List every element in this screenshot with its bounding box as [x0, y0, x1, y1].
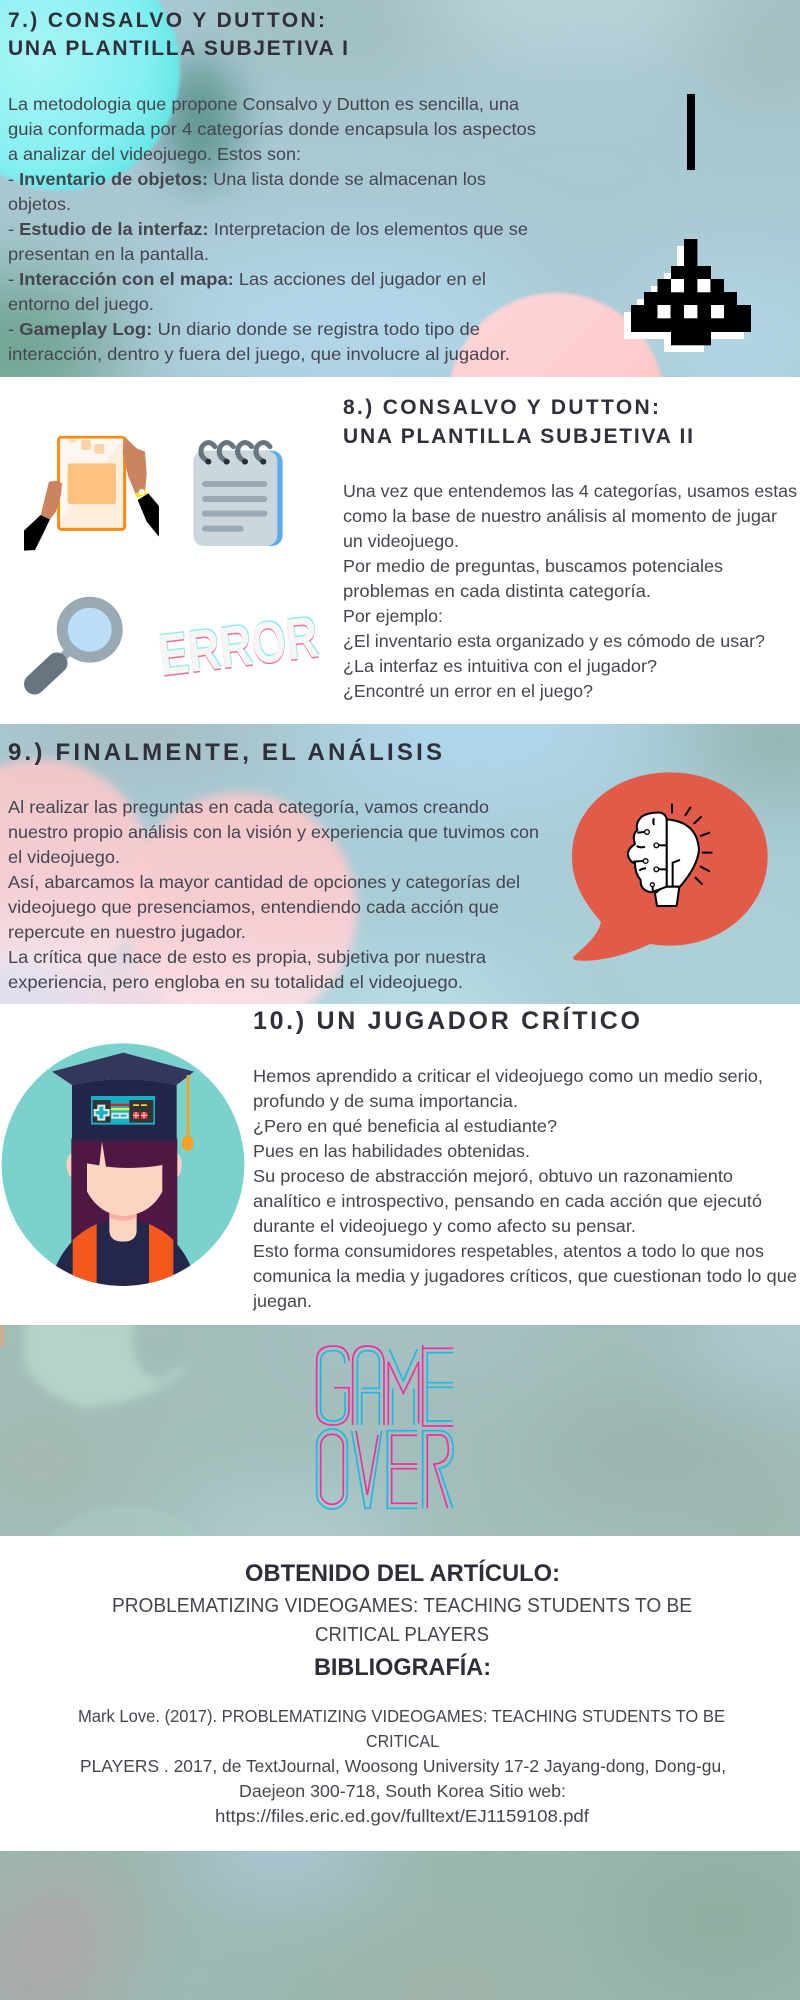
panel: section 7 plantilla subjetiva I: [0, 0, 800, 377]
text block: [343, 481, 797, 701]
text block: Esto forma consumidores respetables, atentos a todo lo que nos: [253, 1241, 764, 1261]
text block: repercute en nuestro jugador.: [8, 922, 246, 942]
illustration: neon GAME OVER lettering: [317, 1345, 453, 1509]
panel: sources and bibliography: [78, 1559, 726, 1826]
panel: game over band: [0, 1325, 800, 1536]
text block: - Interacción con el mapa: Las acciones del jugador en el: [8, 269, 486, 289]
icon: glitched ERROR text: ERROR: [155, 606, 322, 690]
text block: citation: Mark Love. (2017). PROBLEMATIZING VIDEOGAMES: TEACHING STUDENTS TO BE: [78, 1706, 725, 1726]
heading: [8, 9, 348, 60]
heading: bibliografía: BIBLIOGRAFÍA:: [314, 1653, 491, 1681]
text block: Así, abarcamos la mayor cantidad de opciones y categorías del: [8, 872, 520, 892]
text block: Hemos aprendido a criticar el videojuego como un medio serio,: [253, 1066, 763, 1086]
text block: citation: PLAYERS . 2017, de TextJournal, Woosong University 17-2 Jayang-dong, Dong-gu,: [80, 1756, 726, 1776]
text block: Una vez que entendemos las 4 categorías, usamos estas: [343, 481, 797, 501]
text block: [8, 94, 536, 364]
text block: citation: https://files.eric.ed.gov/fulltext/EJ1159108.pdf: [215, 1806, 589, 1826]
heading: UNA PLANTILLA SUBJETIVA I: [8, 37, 348, 60]
heading: 9.) FINALMENTE, EL ANÁLISIS: [8, 738, 442, 766]
text block: ¿Pero en qué beneficia al estudiante?: [253, 1116, 557, 1136]
panel: section 9 finalmente el análisis: [0, 724, 800, 1004]
panel: bottom bokeh band: [0, 1851, 800, 2000]
text block: - Gameplay Log: Un diario donde se registra todo tipo de: [8, 319, 480, 339]
heading: obtenido del artículo: OBTENIDO DEL ARTÍCULO:: [245, 1559, 560, 1587]
icon: glitched ERROR text: ERROR: [155, 604, 322, 688]
text block: ¿La interfaz es intuitiva con el jugador?: [343, 656, 657, 676]
text block: el videojuego.: [8, 847, 120, 867]
background: bokeh band: [0, 724, 800, 1004]
text block: presentan en la pantalla.: [8, 244, 209, 264]
text block: article title: PROBLEMATIZING VIDEOGAMES: TEACHING STUDENTS TO BE: [112, 1595, 692, 1617]
text block: durante el videojuego y como afecto su pensar.: [253, 1216, 636, 1236]
text block: ¿Encontré un error en el juego?: [343, 681, 593, 701]
icon: speech bubble with brain lightbulb: [572, 772, 768, 961]
text block: - Inventario de objetos: Una lista donde se almacenan los: [8, 169, 486, 189]
text block: article title: CRITICAL PLAYERS: [315, 1624, 489, 1646]
icon: glitched ERROR text: ERROR: [156, 603, 322, 687]
text block: como la base de nuestro análisis al momento de jugar: [343, 506, 777, 526]
text block: videojuego que presenciamos, entendiendo cada acción que: [8, 897, 499, 917]
icon: notepad: [193, 442, 283, 546]
text block: - Estudio de la interfaz: Interpretacion de los elementos que se: [8, 219, 528, 239]
text block: comunica la media y jugadores críticos, que cuestionan todo lo que: [253, 1266, 797, 1286]
text block: ¿El inventario esta organizado y es cómodo de usar?: [343, 631, 765, 651]
text block: analítico e introspectivo, pensando en cada acción que ejecutó: [253, 1191, 762, 1211]
text block: entorno del juego.: [8, 294, 154, 314]
text block: juegan.: [252, 1291, 312, 1311]
text block: Al realizar las preguntas en cada categoría, vamos creando: [8, 797, 489, 817]
text block: citation: [78, 1706, 726, 1826]
heading: 10.) UN JUGADOR CRÍTICO: [253, 1006, 640, 1035]
icon: magnifying glass: [34, 602, 117, 684]
text block: Pues en las habilidades obtenidas.: [253, 1141, 530, 1161]
text block: [252, 1066, 797, 1311]
text block: [8, 797, 539, 992]
text block: La metodologia que propone Consalvo y Dutton es sencilla, una: [8, 94, 519, 114]
text block: experiencia, pero engloba en su totalidad el videojuego.: [8, 972, 463, 992]
text block: interacción, dentro y fuera del juego, que involucre al jugador.: [8, 344, 510, 364]
text block: objetos.: [8, 194, 71, 214]
background: bokeh band: [0, 1325, 800, 1536]
icon: graduate avatar with game controller cap: [2, 1043, 244, 1290]
text block: Por ejemplo:: [343, 606, 443, 626]
icon: pixel laser bar: [687, 94, 695, 170]
text block: nuestro propio análisis con la visión y experiencia que tuvimos con: [8, 822, 539, 842]
text block: un videojuego.: [343, 531, 459, 551]
text block: a analizar del videojuego. Estos son:: [8, 144, 301, 164]
panel: section 8 plantilla subjetiva II: [24, 396, 797, 701]
icon: hands holding tablet: [24, 437, 159, 551]
heading: 7.) CONSALVO Y DUTTON:: [8, 9, 325, 32]
text block: Por medio de preguntas, buscamos potenciales: [343, 556, 723, 576]
text block: citation: CRITICAL: [366, 1731, 439, 1751]
text block: profundo y de suma importancia.: [253, 1091, 518, 1111]
text block: Su proceso de abstracción mejoró, obtuvo un razonamiento: [253, 1166, 733, 1186]
heading: UNA PLANTILLA SUBJETIVA II: [343, 425, 693, 448]
icon: pixel spaceship: [624, 239, 751, 352]
heading: [343, 396, 693, 448]
panel: section 10 un jugador crítico: [2, 1006, 797, 1311]
text block: problemas en cada distinta categoría.: [343, 581, 651, 601]
text block: citation: Daejeon 300-718, South Korea Sitio web:: [239, 1781, 566, 1801]
text block: article title: [112, 1595, 692, 1646]
heading: 8.) CONSALVO Y DUTTON:: [343, 396, 659, 419]
text block: guia conformada por 4 categorías donde encapsula los aspectos: [8, 119, 536, 139]
text block: La crítica que nace de esto es propia, subjetiva por nuestra: [8, 947, 486, 967]
background: bokeh band: [0, 0, 800, 377]
